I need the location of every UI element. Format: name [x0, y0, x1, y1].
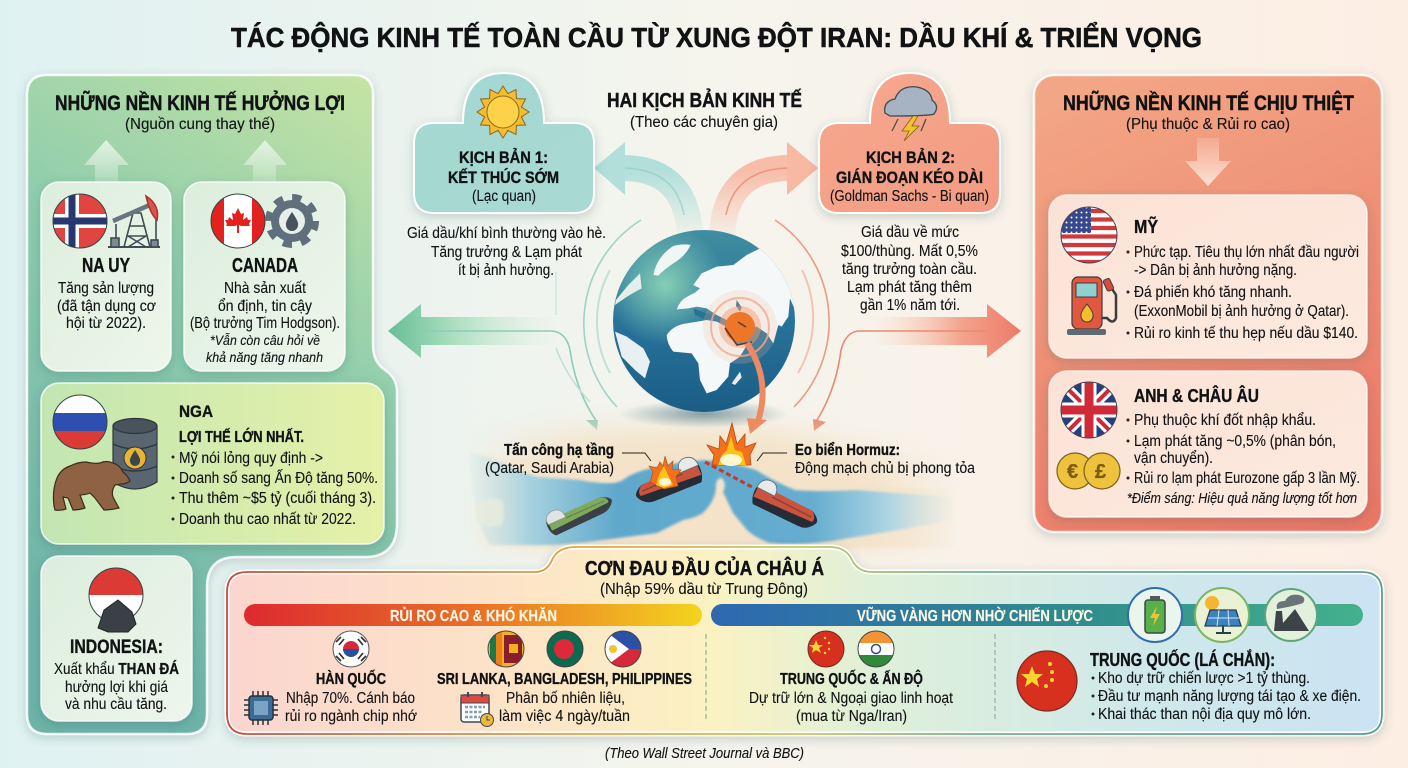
label: scenario 1: KẾT THÚC SỚM: [448, 168, 559, 187]
heading: beneficiaries: NHỮNG NỀN KINH TẾ HƯỞNG LỢI: [55, 90, 345, 115]
icon: euro coin: €: [1067, 461, 1078, 483]
heading: losers: [1063, 90, 1354, 133]
group: China and India: Dự trữ lớn & Ngoại giao linh hoạt: [749, 690, 954, 707]
arrow: scenario 2 curved: [722, 142, 818, 234]
card: Russia: [41, 383, 384, 544]
text: scenario 1 description: ít bị ảnh hưởng.: [458, 262, 554, 279]
arrow: down: [1185, 138, 1231, 186]
panel: scenario 1: [414, 73, 594, 213]
icon: South Korea flag: [333, 631, 369, 667]
label: Canada: *Vẫn còn câu hỏi về: [210, 332, 320, 348]
card: Canada: [184, 182, 345, 371]
label: Russia: Doanh số sang Ấn Độ tăng 50%.: [179, 470, 378, 487]
callout: Hormuz: Động mạch chủ bị phong tỏa: [795, 460, 975, 477]
heading: two scenarios: [607, 89, 802, 131]
label: Canada: (Bộ trưởng Tim Hodgson).: [190, 315, 340, 332]
banner: more resilient: [711, 604, 1363, 626]
icon: coal mine: [1265, 589, 1317, 641]
label: USA: Rủi ro kinh tế thu hẹp nếu dầu $140.: [1134, 325, 1358, 342]
label: Russia: Doanh thu cao nhất từ 2022.: [179, 511, 356, 528]
label: Indonesia: [54, 637, 179, 713]
arrow: up Norway: [84, 140, 129, 182]
icon: Bangladesh flag: [547, 631, 583, 667]
label: Norway: hội từ 2022).: [66, 315, 146, 332]
label: USA: -> Dân bị ảnh hưởng nặng.: [1134, 262, 1297, 279]
label: UK and Europe: ANH & CHÂU ÂU: [1134, 385, 1259, 406]
label: scenario 1: KỊCH BẢN 1:: [459, 148, 548, 167]
heading: Asia: (Nhập 59% dầu từ Trung Đông): [600, 581, 808, 598]
text: scenario 2 description: Giá dầu về mức: [861, 224, 959, 241]
label: USA: MỸ: [1134, 216, 1158, 237]
callout: infrastructure attack: (Qatar, Saudi Arabia): [485, 460, 614, 477]
icon: pound coin: £: [1095, 461, 1106, 483]
heading: Asia: CƠN ĐAU ĐẦU CỦA CHÂU Á: [585, 556, 824, 580]
icon: Canada flag: [211, 194, 265, 248]
tanker: right: [749, 476, 824, 534]
group: South Korea: Nhập 70%. Cánh báo: [286, 690, 415, 707]
group: South Korea: rủi ro ngành chip nhớ: [285, 708, 417, 725]
text: scenario 1 description: [407, 225, 606, 279]
label: Canada: CANADA: [232, 255, 298, 277]
panel: scenario 2: [819, 73, 1000, 213]
text: scenario 2 description: tăng trưởng toàn cầu.: [842, 261, 977, 278]
label: Russia: LỢI THẾ LỚN NHẤT.: [179, 428, 304, 446]
arrow: right large to losers: [813, 304, 1021, 431]
icon: coal: [98, 600, 136, 632]
tanker: green: [542, 487, 616, 537]
label: UK and Europe: Lạm phát tăng ~0,5% (phân bón,: [1134, 433, 1336, 450]
group: Sri Lanka, Bangladesh, Philippines: [437, 631, 692, 726]
icon: US flag: [1061, 207, 1117, 263]
icon: Philippines flag: [605, 631, 641, 667]
panel: losers: [1034, 75, 1382, 532]
icon: UK flag: [1061, 382, 1117, 438]
heading: losers: (Phụ thuộc & Rủi ro cao): [1126, 116, 1290, 133]
heading: beneficiaries: [55, 90, 345, 133]
heading: beneficiaries: (Nguồn cung thay thế): [125, 116, 275, 133]
icon: Indonesia flag: [89, 568, 143, 622]
heading: losers: NHỮNG NỀN KINH TẾ CHỊU THIỆT: [1063, 90, 1354, 115]
label: Indonesia: hưởng lợi khi giá: [65, 679, 168, 696]
icon: pumpjack: [108, 196, 160, 247]
panel: Asia: [227, 547, 1382, 734]
icon: big explosion: [707, 423, 756, 466]
label: Norway: [57, 255, 156, 332]
panel: beneficiaries: [27, 75, 397, 734]
label: UK and Europe: [1126, 385, 1360, 507]
label: scenario 1: [448, 148, 559, 205]
label: UK and Europe: Rủi ro lạm phát Eurozone gấp 3 lần Mỹ.: [1134, 470, 1360, 487]
label: Indonesia: và nhu cầu tăng.: [65, 696, 167, 713]
arrow: hotspot to strait: [747, 343, 767, 434]
label: scenario 2: (Goldman Sachs - Bi quan): [830, 188, 989, 205]
group: Sri Lanka, Bangladesh, Philippines: làm việc 4 ngày/tuần: [499, 708, 630, 725]
icon: battery: [1128, 588, 1182, 642]
icon: small explosion: [649, 456, 681, 489]
label: Indonesia: INDONESIA:: [70, 637, 163, 658]
group: China shield: Đầu tư mạnh năng lượng tái tạo & xe điện.: [1098, 688, 1361, 705]
label: scenario 2: [830, 148, 989, 205]
text: scenario 2 description: [841, 224, 978, 314]
callout: infrastructure attack: [485, 442, 651, 477]
strait of Hormuz map: [470, 423, 975, 548]
icon: chip: [244, 691, 278, 725]
group: China and India: (mua từ Nga/Iran): [796, 708, 907, 725]
icon: solar panel: [1195, 588, 1249, 642]
heading: two scenarios: (Theo các chuyên gia): [630, 114, 778, 131]
callout: Hormuz: Eo biển Hormuz:: [795, 442, 900, 459]
group: South Korea: [244, 631, 417, 725]
label: Canada: Nhà sản xuất: [224, 280, 307, 297]
icon: gear with drop: [269, 198, 315, 244]
label: Russia: Mỹ nói lỏng quy định ->: [179, 450, 323, 467]
text: scenario 1 description: Giá dầu/khí bình thường vào hè.: [407, 225, 606, 242]
group: South Korea: HÀN QUỐC: [316, 670, 386, 688]
arrow: scenario 1 curved: [594, 142, 690, 234]
banner: high risk: [244, 604, 702, 626]
group: China and India: TRUNG QUỐC & ẤN ĐỘ: [780, 670, 923, 688]
icon: euro coin: [1057, 453, 1093, 489]
icon: storm cloud: [885, 87, 937, 141]
callout: Hormuz: [757, 442, 975, 477]
label: Russia: [172, 402, 378, 528]
heading: two scenarios: HAI KỊCH BẢN KINH TẾ: [607, 89, 802, 112]
icon: sun: [477, 86, 529, 138]
group: China shield: Kho dự trữ chiến lược >1 tỷ thùng.: [1098, 670, 1310, 687]
label: Norway: (đã tận dụng cơ: [57, 298, 156, 315]
group: China shield: TRUNG QUỐC (LÁ CHẮN):: [1090, 649, 1275, 670]
card: Indonesia: [41, 556, 192, 721]
label: Norway: NA UY: [82, 255, 131, 277]
card: UK and Europe: [1049, 371, 1367, 517]
title: TÁC ĐỘNG KINH TẾ TOÀN CẦU TỪ XUNG ĐỘT IRAN: DẦU KHÍ & TRIỂN VỌNG: [231, 21, 1202, 53]
icon: fuel pump: [1067, 277, 1116, 335]
globe: [605, 225, 795, 428]
text: scenario 1 description: Tăng trưởng & Lạm phát: [431, 244, 583, 261]
group: Sri Lanka, Bangladesh, Philippines: SRI LANKA, BANGLADESH, PHILIPPINES: [437, 671, 692, 688]
heading: Asia: [585, 556, 824, 598]
icon: China flag large: [1017, 651, 1077, 711]
banner: more resilient: VỮNG VÀNG HƠN NHỜ CHIẾN LƯỢC: [857, 607, 1093, 625]
label: Canada: [190, 255, 340, 365]
icon: Norway flag: [53, 194, 107, 248]
group: China shield: Khai thác than nội địa quy mô lớn.: [1098, 706, 1311, 723]
group: China and India: [749, 631, 954, 725]
label: Russia: Thu thêm ~$5 tỷ (cuối tháng 3).: [179, 490, 376, 507]
label: USA: [1126, 216, 1359, 342]
banner: high risk: RỦI RO CAO & KHÓ KHĂN: [390, 607, 557, 625]
group: China shield: [1017, 649, 1361, 723]
icon: pound coin: [1084, 453, 1120, 489]
label: Russia: NGA: [179, 402, 213, 421]
label: scenario 2: KỊCH BẢN 2:: [866, 148, 955, 167]
label: UK and Europe: *Điểm sáng: Hiệu quả năng lượng tốt hơn: [1127, 491, 1357, 507]
text: scenario 2 description: gần 1% năm tới.: [860, 297, 960, 314]
text: scenario 2 description: Lạm phát tăng thêm: [847, 279, 972, 296]
label: Canada: khả năng tăng nhanh: [206, 349, 323, 365]
tanker: damaged mid: [630, 454, 705, 508]
ripples around globe: [556, 220, 829, 407]
icon: bear: [53, 462, 130, 510]
label: UK and Europe: Phụ thuộc khí đốt nhập khẩu.: [1134, 412, 1316, 429]
icon: India flag: [858, 631, 894, 667]
label: scenario 2: GIÁN ĐOẠN KÉO DÀI: [836, 168, 983, 187]
arrow: up Canada: [243, 140, 287, 182]
icon: oil barrel: [113, 418, 157, 489]
card: USA: [1049, 195, 1367, 358]
icon: Sri Lanka flag: [488, 631, 524, 667]
label: USA: (ExxonMobil bị ảnh hưởng ở Qatar).: [1134, 303, 1349, 320]
label: USA: Đá phiến khó tăng nhanh.: [1134, 284, 1292, 301]
group: Sri Lanka, Bangladesh, Philippines: Phân bố nhiên liệu,: [506, 690, 625, 707]
label: Indonesia: Xuất khẩu THAN ĐÁ: [54, 661, 179, 678]
blockade dashed line: [705, 462, 752, 487]
label: UK and Europe: vận chuyển).: [1134, 450, 1213, 467]
label: Canada: ổn định, tin cậy: [218, 298, 312, 315]
callout: infrastructure attack: Tấn công hạ tầng: [504, 442, 614, 459]
icon: Russia flag: [53, 395, 107, 449]
arrow: left large to beneficiaries: [388, 304, 598, 430]
icon: conflict hotspot: [703, 290, 777, 364]
label: scenario 1: (Lạc quan): [472, 188, 536, 205]
icon: calendar: [461, 692, 494, 726]
label: USA: Phức tạp. Tiêu thụ lớn nhất đầu người: [1134, 244, 1359, 261]
text: scenario 2 description: $100/thùng. Mất 0,5%: [841, 243, 978, 260]
source note: (Theo Wall Street Journal và BBC): [605, 746, 804, 762]
card: Norway: [41, 182, 171, 371]
label: Norway: Tăng sản lượng: [58, 280, 154, 297]
icon: China flag small: [808, 631, 844, 667]
